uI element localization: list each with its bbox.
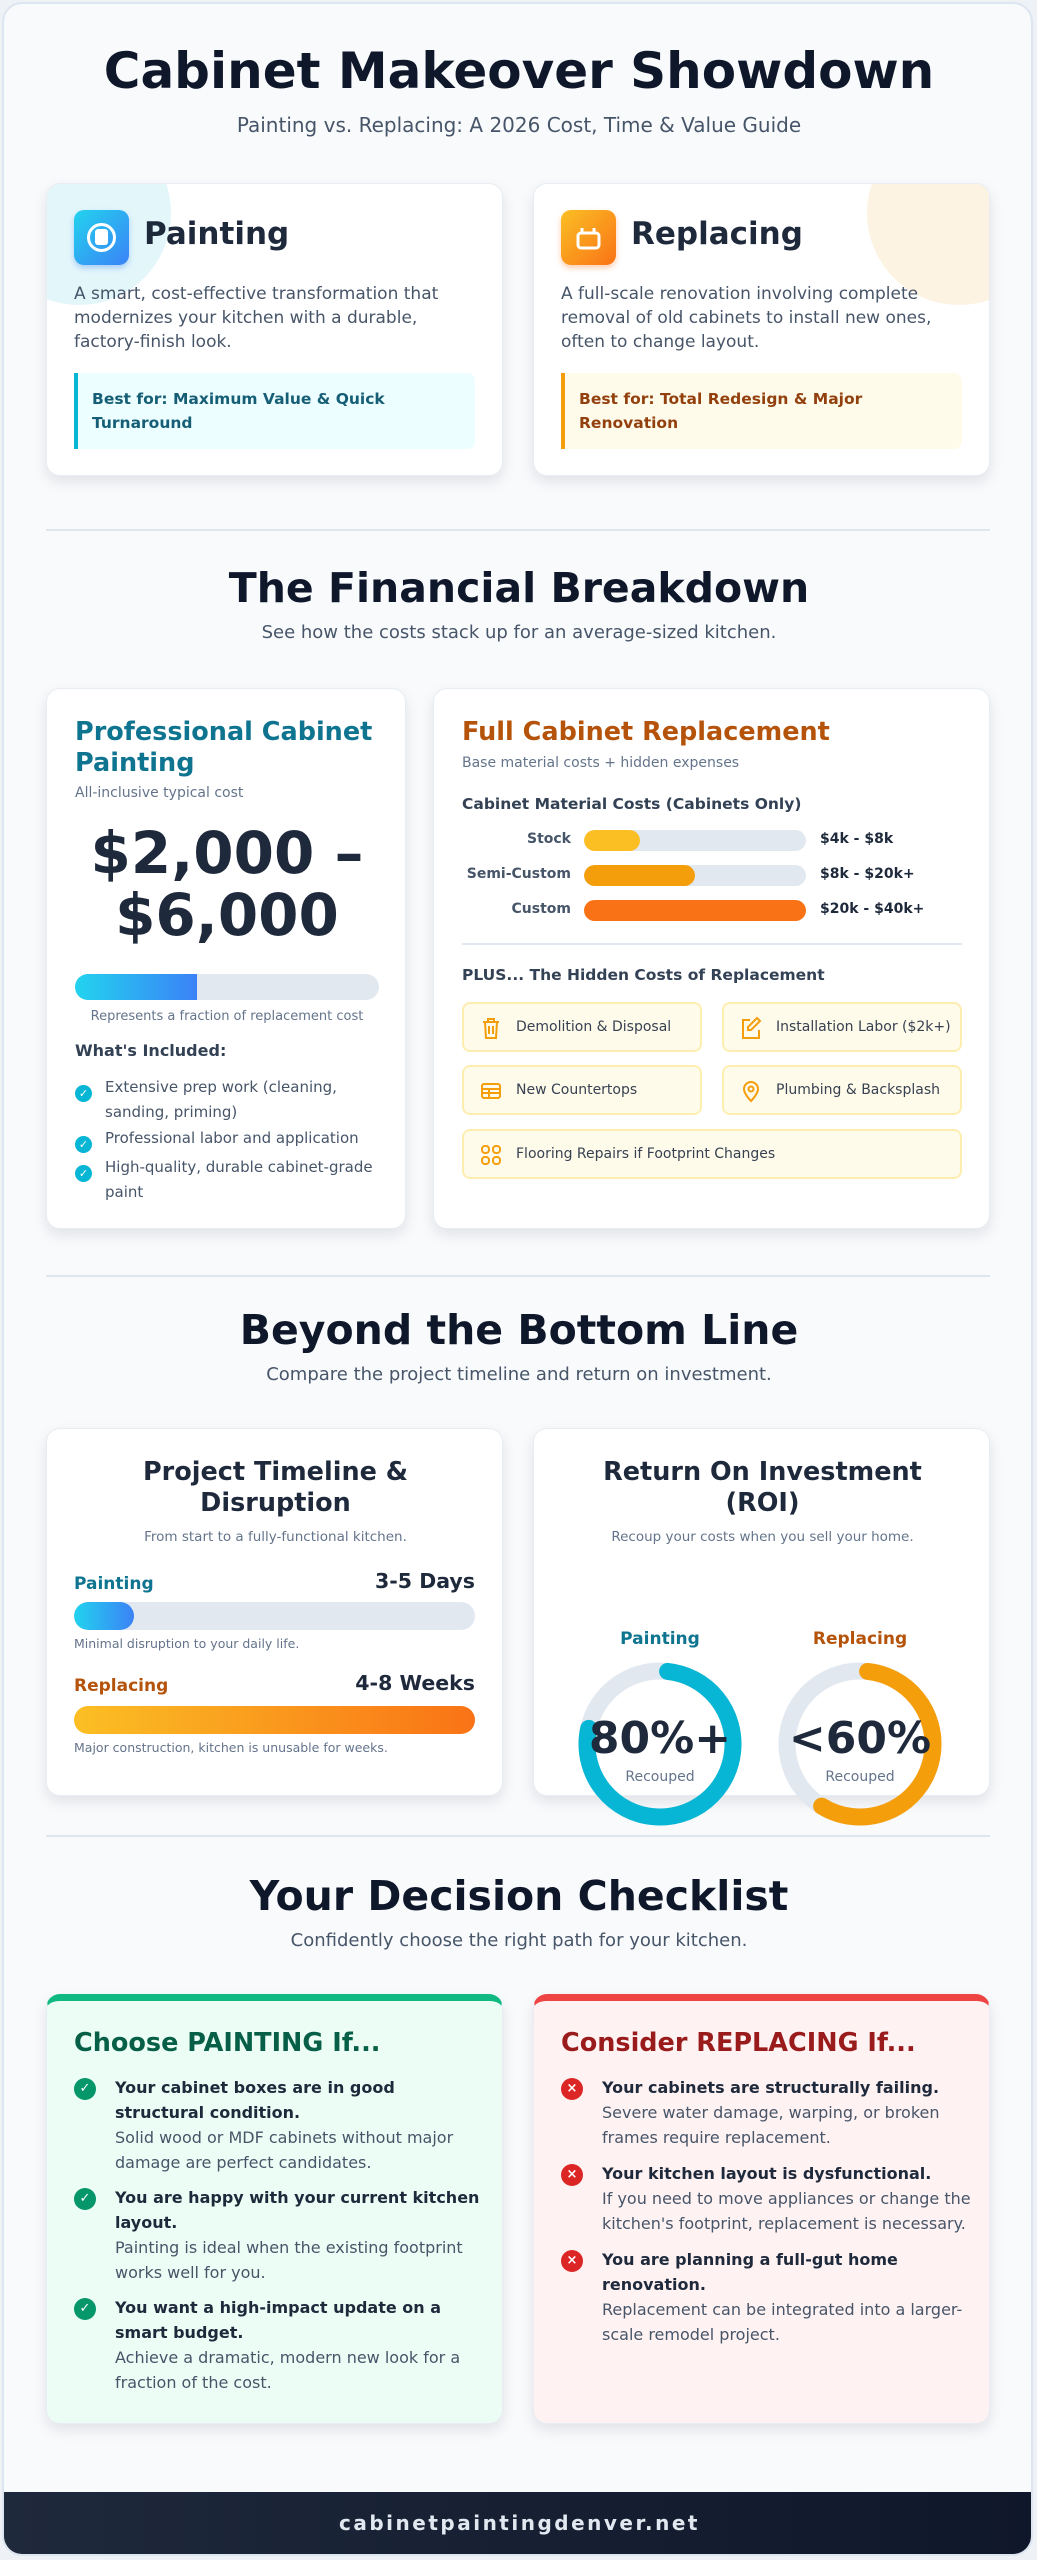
item: You want a high-impact update on a smart budget. [115,2298,441,2342]
subtitle: Painting vs. Replacing: A 2026 Cost, Time & Value Guide [237,113,801,137]
heading: Replacing [631,216,803,252]
timeline: replacing: Major construction, kitchen is unusable for weeks. [74,1740,388,1755]
item: Solid wood or MDF cabinets without major damage are perfect candidates. [115,2128,453,2172]
donut: painting ROI: Painting [620,1629,700,1649]
heading: decision checklist: Your Decision Checklist [250,1872,788,1920]
panel: painting cost [46,688,406,1229]
hidden cost: labor: Installation Labor ($2k+) [776,1019,951,1035]
panel: timeline: Project Timeline & [143,1457,408,1487]
panel: timeline: Disruption [200,1488,351,1518]
title: Cabinet Makeover Showdown [104,42,934,100]
panel: replacement cost: Cabinet Material Costs (Cabinets Only) [462,795,801,813]
bar chart: material costs: $8k - $20k+ [820,866,915,882]
item [561,2164,971,2233]
donut: replacing ROI: Recouped [825,1769,895,1785]
panel: timeline [46,1428,503,1796]
item: × [567,2167,577,2182]
included list: ✓ [79,1167,88,1180]
price: $2,000 – [90,819,364,887]
item: You are planning a full-gut home renovation. [602,2250,898,2294]
donut: painting ROI: 80%+ [589,1713,731,1764]
timeline: replacing [74,1671,475,1755]
bar chart: material costs: $4k - $8k [820,831,893,847]
timeline: painting: Minimal disruption to your daily life. [74,1636,299,1651]
item: × [567,2081,577,2096]
hidden cost: plumbing: Plumbing & Backsplash [776,1082,940,1098]
description: A smart, cost-effective transformation that modernizes your kitchen with a durable, factory-finish look. [74,284,438,352]
timeline: painting: Painting [74,1574,154,1594]
included list: What's Included: [75,1041,226,1060]
subheading: See how the costs stack up for an average-sized kitchen. [262,622,776,643]
panel: consider replacing: Consider REPLACING If... [561,2028,916,2058]
hidden cost: demolition [462,1002,702,1052]
panel: painting cost: All-inclusive typical cost [75,785,243,801]
heading: Full Cabinet Replacement [462,717,830,747]
best for: Best for: Total Redesign & Major Renovation [579,390,862,432]
hidden cost: flooring: Flooring Repairs if Footprint Changes [516,1146,775,1162]
item: Severe water damage, warping, or broken frames require replacement. [602,2103,940,2147]
item: ✓ [80,2301,90,2316]
donut: painting ROI [578,1629,742,1826]
price: $6,000 [115,881,339,949]
hidden cost: plumbing [722,1065,962,1115]
donut: painting ROI: Recouped [625,1769,695,1785]
heading: Professional Cabinet Painting [75,717,372,778]
item: Your cabinet boxes are in good structural condition. [115,2078,395,2122]
item: Your kitchen layout is dysfunctional. [602,2164,931,2183]
panel: painting cost: Represents a fraction of replacement cost [91,1009,363,1024]
bar chart: material costs: Semi-Custom [467,866,571,882]
cost bar [75,974,379,1000]
bar chart: material costs: Stock [527,831,571,847]
panel: replacement cost: PLUS... The Hidden Costs of Replacement [462,966,825,984]
hidden cost: demolition: Demolition & Disposal [516,1019,671,1035]
panel: replacement cost: Base material costs + hidden expenses [462,755,739,771]
panel: ROI: (ROI) [725,1488,800,1518]
item: Replacement can be integrated into a larger-scale remodel project. [602,2300,962,2344]
hidden cost: countertops [462,1065,702,1115]
item: Your cabinets are structurally failing. [602,2078,939,2097]
footer: cabinetpaintingdenver.net [339,2511,700,2535]
timeline: painting: 3-5 Days [375,1569,475,1593]
icon: cabinet box [561,210,616,265]
heading: Painting [144,216,289,252]
donut: replacing ROI [778,1629,942,1826]
item [561,2078,940,2147]
item [74,2188,479,2282]
timeline: painting [74,1569,475,1651]
best for [561,373,962,449]
bar chart: material costs: Custom [512,901,571,917]
panel: choose painting: Choose PAINTING If... [74,2028,380,2058]
item [74,2078,454,2172]
donut: replacing ROI: <60% [789,1713,931,1764]
item [561,2250,962,2344]
included list: High-quality, durable cabinet-grade paint [105,1158,373,1201]
description: A full-scale renovation involving complete removal of old cabinets to install new ones, often to change layout. [561,284,931,352]
panel: replacing intro [533,183,990,476]
icon: paint roller [74,210,129,265]
panel: ROI: Recoup your costs when you sell your home. [611,1529,914,1545]
footer [4,2492,1035,2558]
heading: beyond the bottom line: Beyond the Bottom Line [240,1306,798,1354]
included list: Extensive prep work (cleaning, sanding, priming) [105,1078,337,1121]
hidden cost: flooring [462,1129,962,1179]
donut: replacing ROI: Replacing [813,1629,907,1649]
timeline: replacing: 4-8 Weeks [355,1671,475,1695]
item: ✓ [80,2191,90,2206]
included list [75,1041,373,1201]
item [74,2298,460,2392]
subheading: Compare the project timeline and return on investment. [266,1364,772,1385]
item: × [567,2253,577,2268]
item: Achieve a dramatic, modern new look for a fraction of the cost. [115,2348,460,2392]
included list: Professional labor and application [105,1129,359,1147]
panel: painting intro [46,183,503,476]
item: You are happy with your current kitchen layout. [115,2188,479,2232]
hidden cost: countertops: New Countertops [516,1082,637,1098]
panel: consider replacing [533,1994,990,2424]
heading: financial breakdown: The Financial Breakdown [229,564,809,612]
bar chart: material costs [467,830,924,921]
included list: ✓ [79,1138,88,1151]
price [90,819,364,949]
timeline: replacing: Replacing [74,1676,168,1696]
best for [74,373,475,449]
hidden cost: labor [722,1002,962,1052]
panel: ROI: Return On Investment [603,1457,922,1487]
item: ✓ [80,2081,90,2096]
best for: Best for: Maximum Value & Quick Turnaround [92,390,385,432]
panel: timeline: From start to a fully-functional kitchen. [144,1529,407,1545]
included list: ✓ [79,1087,88,1100]
bar chart: material costs: $20k - $40k+ [820,901,924,917]
item: If you need to move appliances or change the kitchen's footprint, replacement is necessary. [602,2189,971,2233]
panel: ROI [533,1428,990,1796]
subheading: Confidently choose the right path for your kitchen. [291,1930,747,1951]
panel: choose painting [46,1994,503,2424]
item: Painting is ideal when the existing footprint works well for you. [115,2238,463,2282]
panel: replacement cost [433,688,990,1229]
